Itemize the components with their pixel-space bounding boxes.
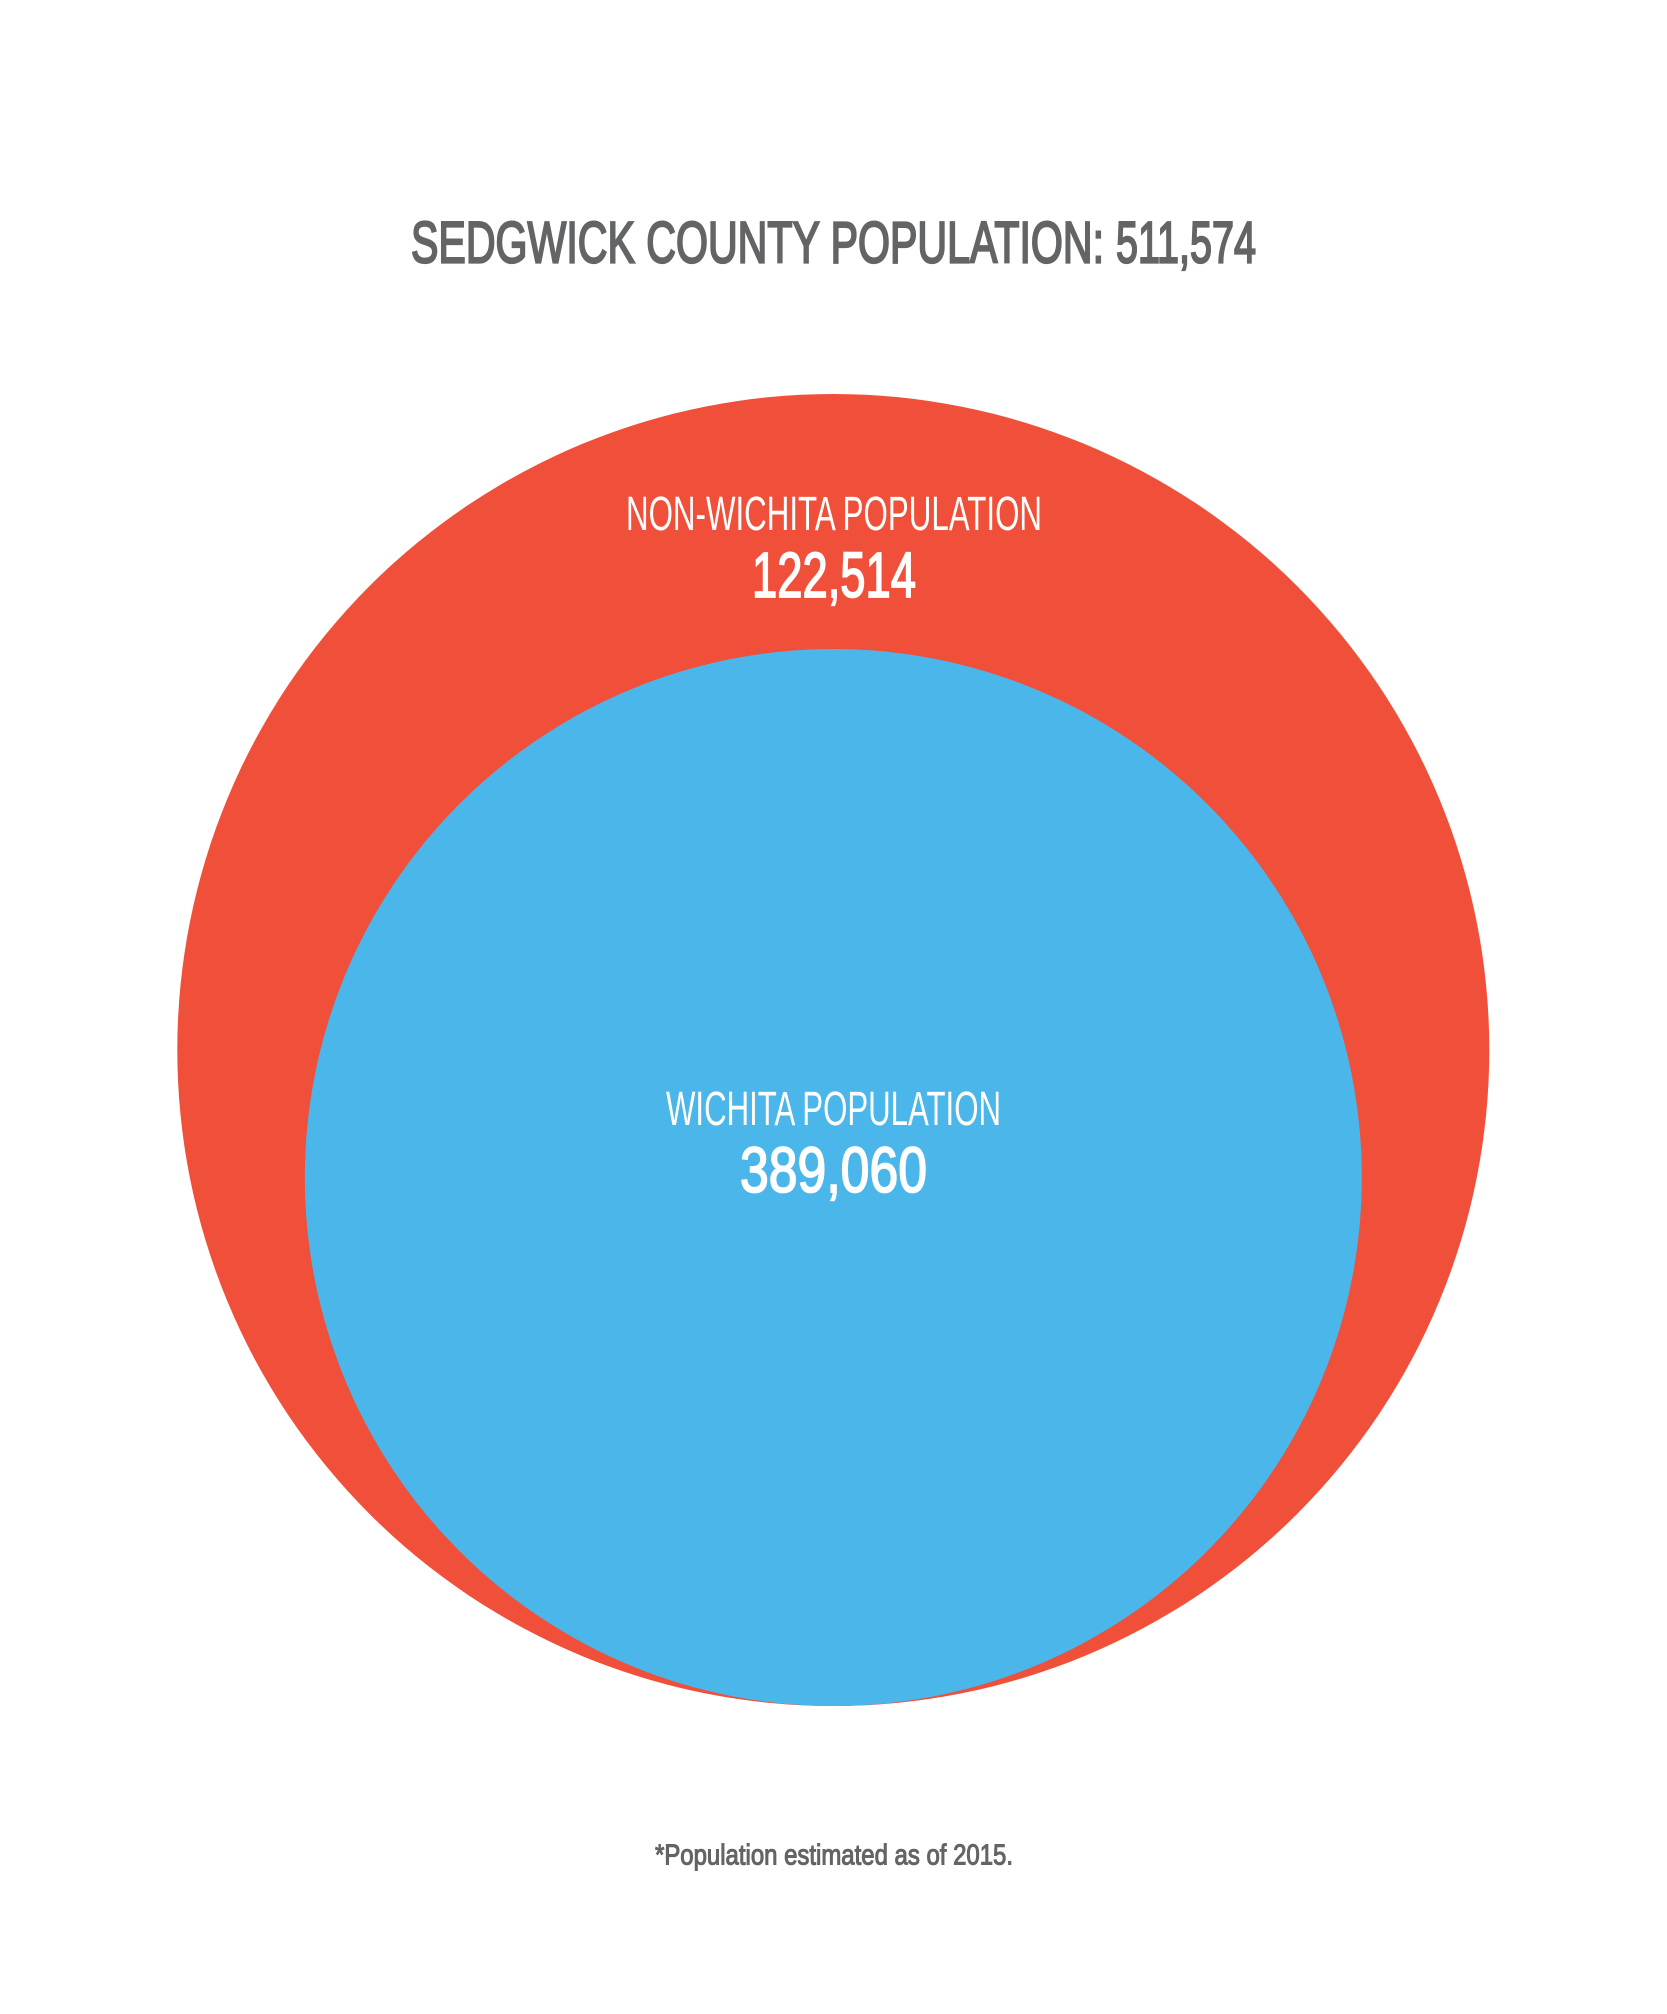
title: SEDGWICK COUNTY POPULATION: bbox=[411, 210, 1104, 276]
title: 511,574 bbox=[1116, 210, 1256, 276]
footnote: *Population estimated as of 2015. bbox=[655, 1840, 1013, 1872]
label: non-Wichita population: NON-WICHITA POPULATION bbox=[626, 488, 1042, 541]
value: Wichita population: 389,060 bbox=[740, 1134, 927, 1206]
label: Wichita population: WICHITA POPULATION bbox=[666, 1083, 1001, 1136]
nested circle chart bbox=[177, 394, 1489, 1706]
value: non-Wichita population: 122,514 bbox=[752, 539, 916, 611]
circle: Wichita population bbox=[305, 649, 1362, 1706]
circle: Sedgwick County, non-Wichita population bbox=[177, 394, 1489, 1706]
